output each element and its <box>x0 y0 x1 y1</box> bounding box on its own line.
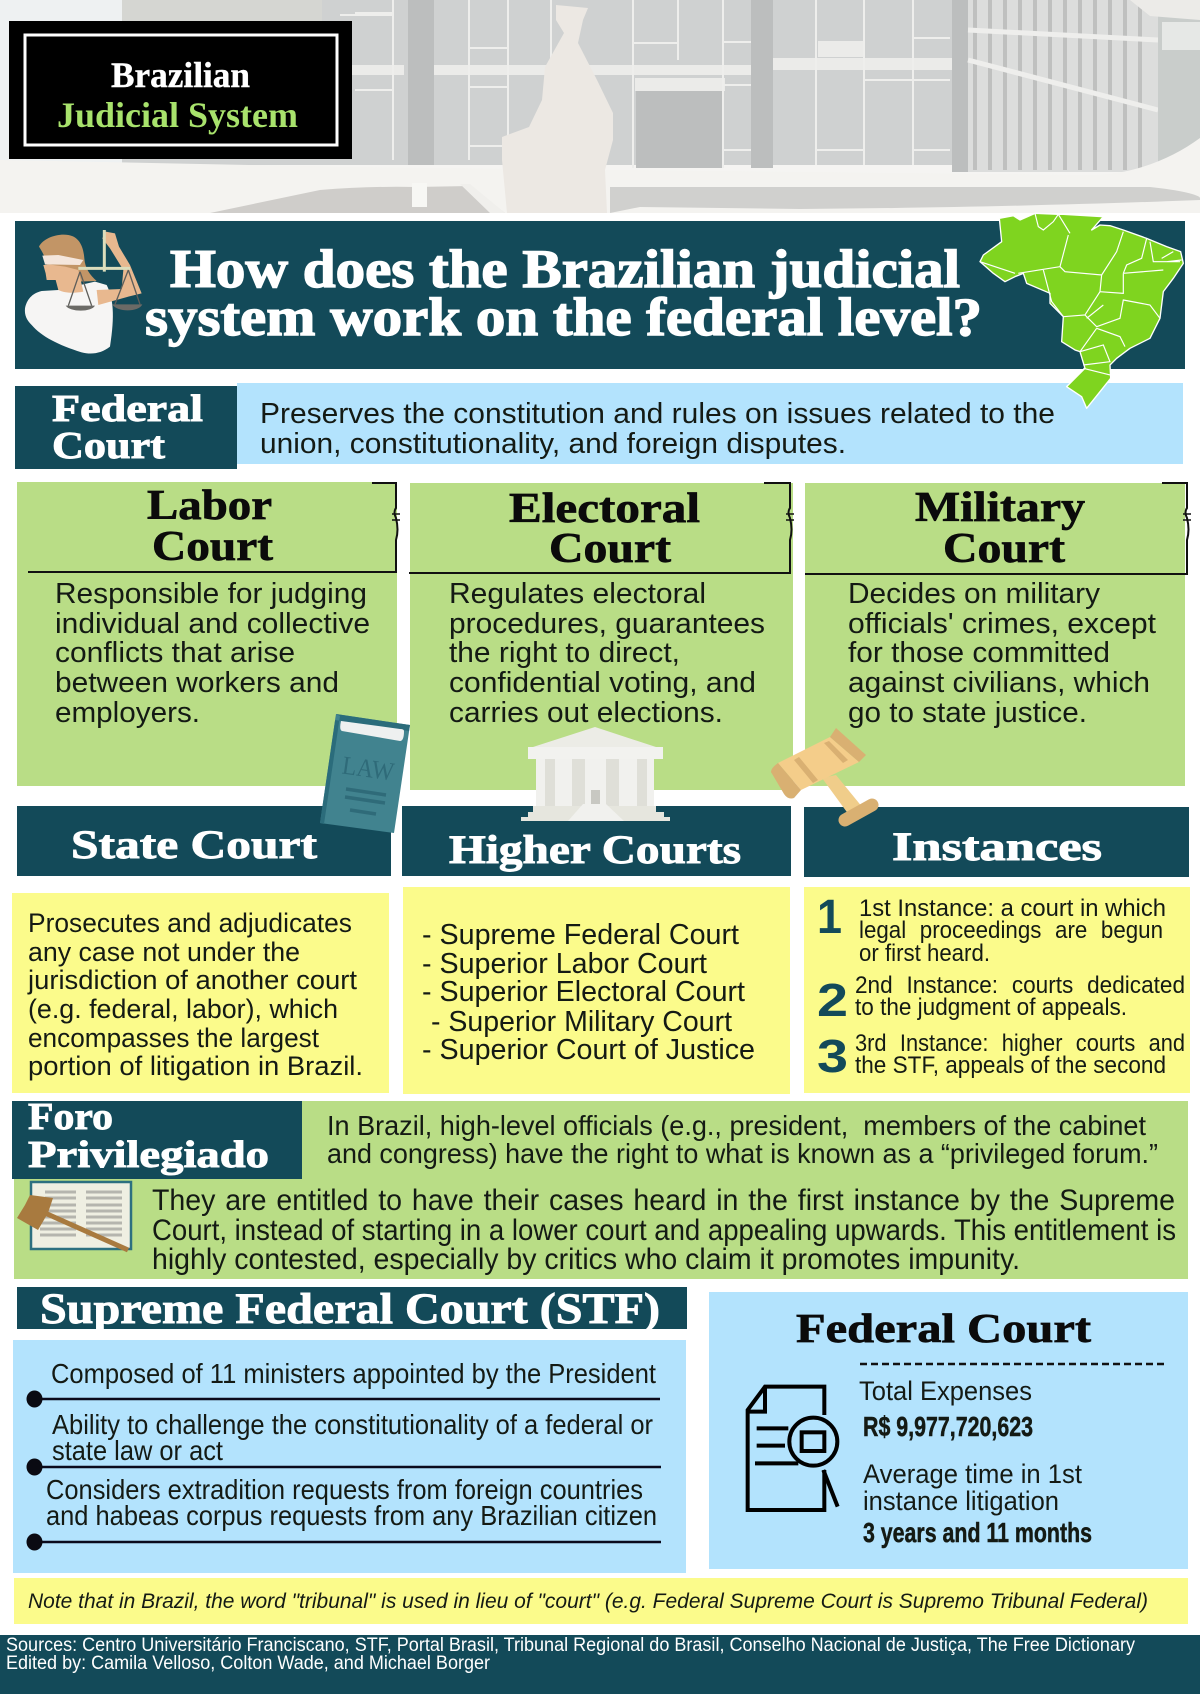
electoral court description: Regulates electoral <box>449 578 706 610</box>
electoral court description: confidential voting, and <box>449 667 756 699</box>
panel: military court <box>805 483 1191 786</box>
foro privilegiado heading <box>28 1096 269 1176</box>
foro privilegiado heading: Privilegiado <box>28 1134 269 1176</box>
foro intro text <box>327 1110 1158 1169</box>
labor court description <box>55 578 370 729</box>
icon: open book with gavel <box>17 1182 131 1250</box>
military court heading <box>915 485 1085 572</box>
statistic: average time <box>863 1459 1092 1548</box>
higher courts header: Higher Courts <box>449 827 741 872</box>
foro main text: They are entitled to have their cases heard in the first instance by the Supreme <box>152 1184 1175 1217</box>
icon: law book <box>320 714 410 833</box>
statistic: total expenses: Total Expenses <box>859 1376 1032 1406</box>
heading text: system work on the federal level? <box>145 287 982 347</box>
fact: extradition <box>26 1474 661 1550</box>
military court description <box>848 578 1156 729</box>
footer: sources and editors: Edited by: Camila Velloso, Colton Wade, and Michael Borger <box>6 1653 491 1674</box>
federal court description <box>260 398 1055 460</box>
labor court description: conflicts that arise <box>55 637 295 669</box>
labor court heading <box>147 483 273 570</box>
electoral court description: carries out elections. <box>449 697 723 729</box>
panel: instances <box>804 887 1190 1093</box>
labor court heading: Court <box>152 524 273 570</box>
panel: state court text: Prosecutes and adjudicates <box>28 908 352 938</box>
electoral court heading: Electoral <box>509 486 700 532</box>
icon: document with magnifier <box>748 1387 838 1510</box>
panel: state court text: any case not under the <box>28 937 300 967</box>
foro intro text: and congress) have the right to what is known as a “privileged forum.” <box>327 1138 1158 1169</box>
instance 3 <box>817 1030 1185 1082</box>
military court description: go to state justice. <box>848 697 1087 729</box>
panel: state court text: (e.g. federal, labor), which <box>28 994 338 1024</box>
panel: federal court summary <box>15 383 1183 469</box>
statistic: average time: Average time in 1st <box>863 1459 1083 1489</box>
note about the word tribunal: Note that in Brazil, the word "tribunal" is used in lieu of "court" (e.g. Federal Supreme Court is Supremo Tribunal Federal) <box>28 1589 1148 1613</box>
instance 1: or first heard. <box>859 940 990 967</box>
electoral court description: the right to direct, <box>449 637 680 669</box>
instance 1 <box>817 891 1166 967</box>
icon: law book: LAW <box>340 751 396 787</box>
fact: constitutionality: state law or act <box>52 1435 223 1466</box>
panel: higher courts list: - Superior Electoral Court <box>422 976 745 1008</box>
supreme federal court header: Supreme Federal Court (STF) <box>40 1286 660 1333</box>
federal court label: Court <box>52 425 165 467</box>
federal court description: Preserves the constitution and rules on issues related to the <box>260 398 1055 430</box>
icon: gavel <box>771 728 872 820</box>
federal court label <box>52 388 203 467</box>
labor court description: between workers and <box>55 667 339 699</box>
instances header <box>804 807 1189 877</box>
panel: state court text <box>12 893 389 1093</box>
icon: statue of justice <box>502 5 613 213</box>
footer: sources and editors <box>0 1635 1200 1694</box>
military court description: officials' crimes, except <box>848 608 1156 640</box>
footer: sources and editors: Sources: Centro Universitário Franciscano, STF, Portal Brasil, Tribunal Regional do Brasil, Conselho Nacional de Justiça, The Free Dictionary <box>6 1635 1135 1656</box>
foro main text: highly contested, especially by critics who claim it promotes impunity. <box>152 1243 1020 1276</box>
panel: higher courts list: - Supreme Federal Court <box>422 919 739 951</box>
title badge <box>9 21 352 159</box>
fact: extradition: and habeas corpus requests from any Brazilian citizen <box>46 1500 657 1531</box>
panel: labor court <box>17 482 400 786</box>
higher courts header <box>402 806 791 876</box>
heading text <box>145 239 982 347</box>
icon: courthouse <box>521 727 670 821</box>
statistic: average time: instance litigation <box>863 1486 1059 1516</box>
fact: composition: Composed of 11 ministers appointed by the President <box>51 1358 656 1389</box>
panel: higher courts list: - Superior Court of Justice <box>422 1034 755 1066</box>
hero photo: Supreme Court building and statue <box>0 0 1200 213</box>
instances header: Instances <box>892 824 1102 869</box>
fact: constitutionality: Ability to challenge the constitutionality of a federal or <box>52 1409 653 1440</box>
icon: Lady Justice with scales <box>25 230 142 354</box>
foro privilegiado heading: Foro <box>28 1096 113 1138</box>
icon: map of Brazil <box>980 213 1183 408</box>
foro intro text: In Brazil, high-level officials (e.g., president, members of the cabinet <box>327 1110 1146 1141</box>
panel: higher courts list <box>403 887 790 1094</box>
instance 1: legal proceedings are begun <box>859 917 1163 944</box>
panel: supreme federal court facts <box>13 1340 686 1573</box>
foro main text <box>152 1184 1176 1276</box>
federal court label: Federal <box>52 388 203 430</box>
military court heading: Military <box>915 485 1085 531</box>
panel: state court text: jurisdiction of another court <box>27 965 358 995</box>
fact: constitutionality <box>26 1409 661 1476</box>
instance 2: 2 <box>817 974 848 1026</box>
electoral court description: procedures, guarantees <box>449 608 765 640</box>
federal court description: union, constitutionality, and foreign disputes. <box>260 428 846 460</box>
main heading panel <box>15 221 1185 369</box>
state court header: State Court <box>71 822 318 867</box>
instance 3: the STF, appeals of the second <box>855 1052 1166 1079</box>
statistics heading: Federal Court <box>796 1305 1091 1351</box>
panel: higher courts list: - Superior Labor Court <box>422 948 707 980</box>
panel: state court text: encompasses the largest <box>28 1023 319 1053</box>
fact: extradition: Considers extradition requests from foreign countries <box>46 1474 643 1505</box>
statistic: average time: 3 years and 11 months <box>863 1517 1092 1548</box>
panel: foro privilegiado <box>12 1096 1188 1279</box>
panel: electoral court <box>409 483 794 790</box>
statistic: total expenses: R$ 9,977,720,623 <box>863 1411 1033 1442</box>
military court heading: Court <box>943 526 1065 572</box>
military court description: Decides on military <box>848 578 1101 610</box>
military court description: against civilians, which <box>848 667 1150 699</box>
instance 2 <box>817 972 1185 1026</box>
labor court description: individual and collective <box>55 608 370 640</box>
panel: state court text: portion of litigation in Brazil. <box>28 1051 363 1081</box>
heading text: How does the Brazilian judicial <box>170 239 960 299</box>
military court description: for those committed <box>848 637 1110 669</box>
statistic: total expenses <box>859 1376 1033 1442</box>
electoral court heading <box>509 486 700 572</box>
panel: federal court statistics <box>709 1292 1188 1569</box>
instance 2: 2nd Instance: courts dedicated <box>855 972 1185 999</box>
instance 2: to the judgment of appeals. <box>855 994 1127 1021</box>
title badge: Judicial System <box>57 95 298 135</box>
fact: composition <box>26 1358 660 1408</box>
labor court description: employers. <box>55 697 200 729</box>
electoral court description <box>449 578 765 729</box>
note about the word tribunal <box>14 1578 1188 1624</box>
title badge: Brazilian <box>111 55 250 95</box>
instance 3: 3 <box>817 1030 848 1082</box>
labor court heading: Labor <box>147 483 272 529</box>
instance 1: 1 <box>817 891 842 944</box>
instance 1: 1st Instance: a court in which <box>859 895 1166 922</box>
state court header <box>17 806 391 876</box>
panel: higher courts list: - Superior Military Court <box>431 1006 732 1038</box>
electoral court heading: Court <box>549 526 671 572</box>
labor court description: Responsible for judging <box>55 578 367 610</box>
